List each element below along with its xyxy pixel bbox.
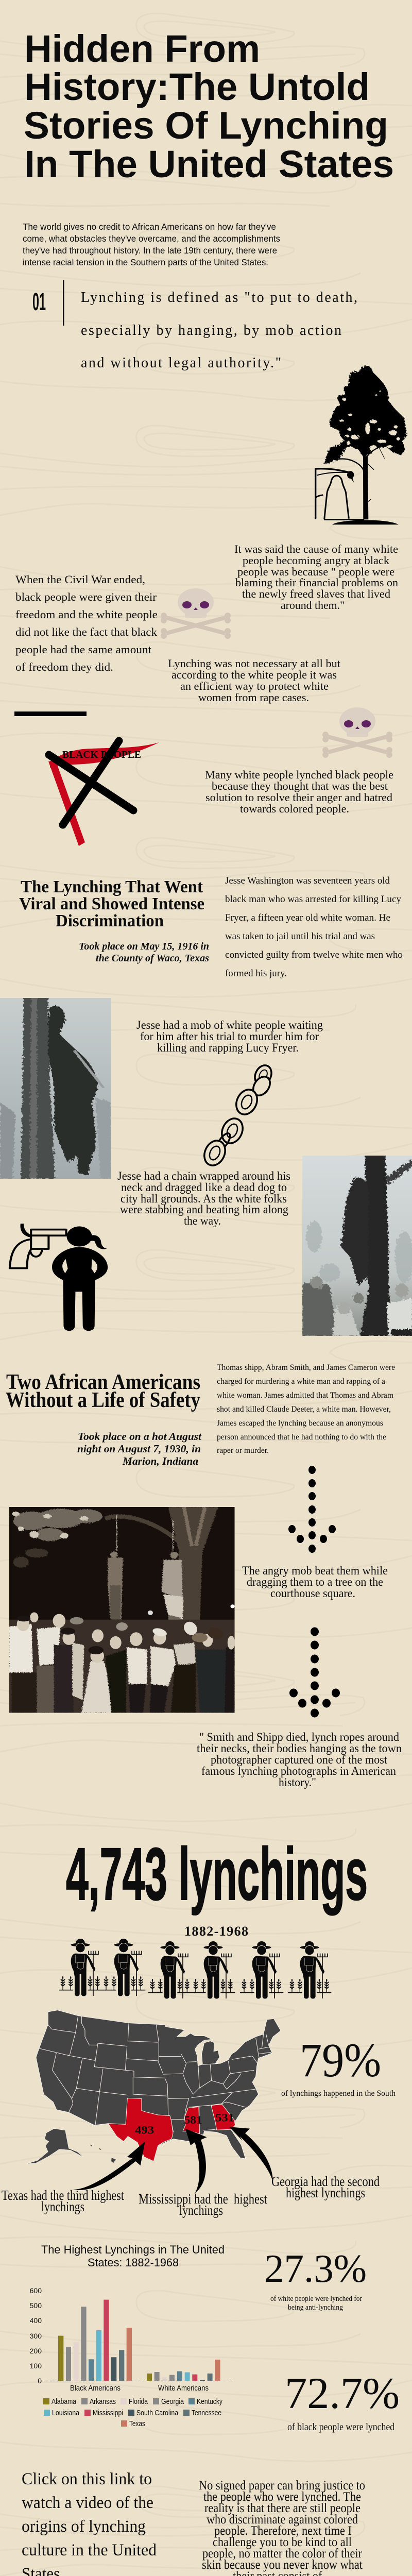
chart title: States: 1882-1968	[88, 2256, 179, 2269]
link text: video: culture in the United	[22, 2541, 157, 2560]
text: many white people	[205, 768, 393, 815]
arrow: Mississippi	[185, 2129, 207, 2193]
legend: Georgia	[161, 2398, 184, 2406]
stat: 79 percent	[281, 2034, 396, 2098]
text: not necessary: women from rape cases.	[198, 691, 309, 704]
definition of lynching: Lynching is defined as "to put to death,	[81, 290, 357, 306]
text: mob waiting: for him after his trial to murder him for	[140, 1030, 319, 1043]
chart title: The Highest Lynchings in The United	[41, 2243, 225, 2256]
y axis labels: 400	[30, 2316, 42, 2325]
label: Georgia	[271, 2174, 380, 2200]
legend: Tennessee	[192, 2409, 221, 2417]
text: Jesse Washington: was taken to jail until his trial and was	[225, 931, 375, 942]
link text: video: origins of lynching	[22, 2517, 146, 2536]
map: United States	[27, 2010, 281, 2190]
text: cause of anger: It was said the cause of many white	[234, 543, 398, 555]
legend: Florida	[129, 2398, 148, 2406]
arrow: Georgia	[229, 2127, 273, 2182]
text: Smith and Shipp quote: history."	[279, 1776, 316, 1789]
title	[24, 27, 394, 185]
legend: South Carolina	[136, 2409, 179, 2417]
label: Georgia: highest lynchings	[286, 2185, 365, 2200]
intro paragraph	[23, 222, 280, 267]
text: civil war: did not like the fact that black	[15, 625, 157, 638]
text: chain: the way.	[184, 1214, 221, 1227]
dotted arrow 2	[289, 1627, 340, 1718]
stat: 72.7 percent: of black people were lynched	[287, 2421, 394, 2433]
photo: Marion lynching crowd	[9, 1507, 235, 1713]
heading: two African Americans: Two African Americans	[6, 1370, 200, 1394]
text: chain: city hall grounds. As the white folks	[121, 1192, 287, 1205]
text: cause of anger: blaming their financial problems on	[235, 576, 398, 589]
text: cause of anger	[234, 543, 398, 612]
heading: two African Americans: Without a Life of Safety	[6, 1388, 200, 1412]
label: Georgia: Georgia had the second	[271, 2174, 380, 2189]
text: not necessary	[168, 657, 340, 704]
dotted arrow 1	[288, 1466, 336, 1553]
text: Thomas Shipp: raper or murder.	[217, 1446, 269, 1455]
text: cause of anger: the newly freed slaves that lived	[242, 587, 390, 600]
text: many white people: because they thought that was the best	[212, 779, 388, 792]
text: closing statement: reality is that there are still people	[204, 2501, 360, 2515]
chart title	[41, 2243, 225, 2269]
title: Stories Of Lynching	[24, 104, 388, 147]
x axis labels	[70, 2384, 209, 2393]
icon: crossed out black people flag: BLACK PEOPLE	[62, 749, 141, 760]
arrow: Texas	[73, 2142, 145, 2190]
text: chain: Jesse had a chain wrapped around his	[117, 1170, 290, 1182]
subheading: Marion date	[77, 1430, 202, 1467]
text: not necessary: according to the white people it was	[171, 668, 337, 681]
icon row: farmers	[59, 1939, 331, 1998]
label: Texas	[2, 2188, 124, 2214]
text: chain: were stabbing and beating him along	[120, 1203, 288, 1216]
text: closing statement: skin because you never know what	[202, 2558, 363, 2572]
text: angry mob: courthouse square.	[270, 1587, 355, 1600]
stat: 27.3 percent: 27.3%	[264, 2246, 367, 2291]
text: civil war: of freedom they did.	[15, 660, 113, 673]
text: chain	[117, 1170, 290, 1227]
definition of lynching: especially by hanging, by mob action	[81, 323, 341, 338]
intro paragraph: The world gives no credit to African Americans on how far they've	[23, 222, 276, 232]
icon: skull and crossbones	[161, 588, 231, 639]
text: Jesse Washington: black man who was arrested for killing Lucy	[225, 894, 402, 905]
text: Jesse Washington: convicted guilty from twelve white men who	[225, 950, 403, 960]
link text: video	[22, 2470, 157, 2576]
text: cause of anger: around them."	[281, 599, 345, 612]
icon: gun pointed at person	[10, 1224, 108, 1331]
stat: 27.3 percent: of white people were lynched for	[270, 2295, 362, 2303]
text: Jesse Washington	[225, 875, 403, 979]
text: cause of anger: people becoming angry at black	[243, 554, 389, 567]
text: closing statement	[199, 2479, 365, 2576]
black bar	[14, 711, 87, 716]
y axis labels: 300	[30, 2332, 42, 2340]
heading: viral lynching	[19, 877, 204, 930]
label: Mississippi: lynchings	[179, 2202, 223, 2218]
title: In The United States	[24, 143, 394, 185]
definition of lynching: and without legal authority."	[81, 355, 281, 371]
subheading: Marion date: night on August 7, 1930, in	[77, 1443, 201, 1455]
text: Smith and Shipp quote: photographer captured one of the most	[211, 1753, 388, 1766]
text: mob waiting	[136, 1019, 323, 1054]
stat: 27.3 percent: being anti-lynching	[288, 2303, 343, 2312]
icon: tree with noose	[316, 366, 407, 524]
y axis labels: 100	[30, 2362, 42, 2370]
text: not necessary: an efficient way to protect white	[180, 680, 329, 692]
text: civil war: When the Civil War ended,	[15, 573, 145, 586]
legend: Texas	[129, 2420, 145, 2428]
text: closing statement: the people who were lynched. The	[203, 2490, 361, 2504]
bar chart: highest lynchings	[30, 2243, 234, 2428]
text: angry mob: The angry mob beat them while	[242, 1564, 388, 1577]
legend: Alabama	[52, 2398, 77, 2406]
text: civil war	[15, 573, 158, 673]
map: United States: 493	[135, 2124, 154, 2137]
heading: two African Americans	[6, 1370, 200, 1412]
text: Jesse Washington: Fryer, a fifteen year old white woman. He	[225, 912, 390, 923]
title: History:The Untold	[24, 65, 370, 108]
text: many white people: towards colored people.	[240, 802, 349, 815]
icon: chain	[200, 1063, 274, 1169]
text: 01	[32, 289, 46, 316]
photo: Jesse Washington hanging at tree	[0, 994, 111, 1179]
text: Jesse Washington: formed his jury.	[225, 968, 287, 979]
icon: skull and crossbones	[322, 707, 392, 758]
heading: viral lynching: Discrimination	[56, 911, 164, 930]
text: civil war: people had the same amount	[15, 643, 151, 656]
legend: Kentucky	[197, 2398, 223, 2406]
x axis labels: White Americans	[158, 2384, 209, 2393]
text: angry mob: dragging them to a tree on the	[247, 1575, 383, 1588]
subheading: Marion date: Marion, Indiana	[122, 1455, 198, 1467]
map: United States: 581	[184, 2113, 202, 2126]
label: Texas: lynchings	[41, 2199, 84, 2214]
text: Smith and Shipp quote: " Smith and Shipp died, lynch ropes around	[199, 1731, 399, 1743]
text: closing statement: people, no matter the color of their	[202, 2547, 363, 2561]
text: not necessary: Lynching was not necessary at all but	[168, 657, 340, 670]
subheading: Waco date: Took place on May 15, 1916 in	[79, 941, 209, 952]
text: Thomas Shipp: James escaped the lynching because an anonymous	[217, 1419, 383, 1428]
date range: 1882-1968	[184, 1924, 248, 1939]
text: many white people: solution to resolve their anger and hatred	[205, 791, 392, 804]
stat: 72.7 percent: 72.7%	[285, 2368, 400, 2418]
text: Thomas Shipp: Thomas shipp, Abram Smith, and James Cameron were	[217, 1363, 395, 1372]
text: mob waiting: killing and rapping Lucy Fryer.	[157, 1041, 299, 1054]
text: closing statement: No signed paper can bring justice to	[199, 2479, 365, 2493]
label: Mississippi: Mississippi had the highest	[139, 2191, 267, 2207]
y axis labels	[30, 2286, 42, 2385]
subheading: Waco date: the County of Waco, Texas	[96, 953, 209, 964]
heading: viral lynching: Viral and Showed Intense	[19, 894, 204, 913]
map: United States: 531	[215, 2111, 234, 2124]
y axis labels: 0	[38, 2377, 42, 2385]
text: closing statement: people. Therefore, next time I	[214, 2524, 352, 2538]
stat: 27.3 percent	[264, 2246, 367, 2312]
subheading: Waco date	[79, 941, 209, 964]
text: Smith and Shipp quote: famous lynching photographs in American	[201, 1765, 396, 1777]
subheading: Marion date: Took place on a hot August	[78, 1430, 202, 1443]
definition of lynching	[81, 290, 357, 371]
text: Smith and Shipp quote: their necks, their bodies hanging as the town	[197, 1742, 402, 1755]
text: angry mob	[242, 1564, 388, 1600]
text: mob waiting: Jesse had a mob of white people waiting	[136, 1019, 323, 1031]
text: closing statement: who discriminate against colored	[207, 2513, 358, 2527]
photo: lynching with onlookers	[302, 1152, 412, 1336]
link text: video: watch a video of the	[22, 2494, 153, 2512]
label: Texas: Texas had the third highest	[2, 2188, 124, 2203]
text: Thomas Shipp: white woman. James admitted that Thomas and Abram	[217, 1391, 394, 1400]
text: civil war: black people were given their	[15, 590, 157, 603]
legend: Arkansas	[90, 2398, 116, 2406]
legend	[43, 2398, 223, 2428]
divider beside definition	[63, 280, 64, 326]
text: Thomas Shipp: charged for murdering a white man and rapping of a	[217, 1377, 385, 1386]
text: Thomas Shipp: shot and killed Claude Deeter, a white man. However,	[217, 1405, 391, 1414]
x axis labels: Black Americans	[70, 2384, 121, 2393]
text: many white people: Many white people lynched black people	[205, 768, 393, 781]
legend: Mississippi	[93, 2409, 123, 2417]
y axis labels: 500	[30, 2301, 42, 2310]
text: chain: neck and dragged like a dead dog to	[121, 1181, 287, 1194]
text: Jesse Washington: Jesse Washington was seventeen years old	[225, 875, 390, 886]
legend: Louisiana	[52, 2409, 80, 2417]
text: closing statement: challenge you to be kind to all	[213, 2535, 352, 2549]
bars	[58, 2300, 220, 2381]
y axis labels: 600	[30, 2286, 42, 2295]
text: Smith and Shipp quote	[197, 1731, 402, 1789]
title: Hidden From	[24, 27, 260, 70]
text: civil war: freedom and the white people	[15, 608, 158, 621]
intro paragraph: come, what obstacles they've overcame, and the accomplishments	[23, 233, 280, 244]
stat: 79 percent: of lynchings happened in the South	[281, 2089, 396, 2098]
text: cause of anger: people was because " people were	[237, 565, 394, 578]
intro paragraph: they've had throughout history. In the late 19th century, there were	[23, 245, 277, 256]
label: Mississippi	[139, 2191, 267, 2218]
text: Thomas Shipp: person announced that he had nothing to do with the	[217, 1433, 386, 1442]
intro paragraph: intense racial tension in the Southern parts of the United States.	[23, 257, 268, 267]
y axis labels: 200	[30, 2347, 42, 2355]
heading: viral lynching: The Lynching That Went	[21, 877, 203, 896]
link text: video: Click on this link to	[22, 2470, 152, 2488]
stat: 79 percent: 79%	[300, 2034, 381, 2087]
text: Thomas Shipp	[217, 1363, 395, 1455]
icon: crossed out black people flag	[48, 741, 159, 846]
